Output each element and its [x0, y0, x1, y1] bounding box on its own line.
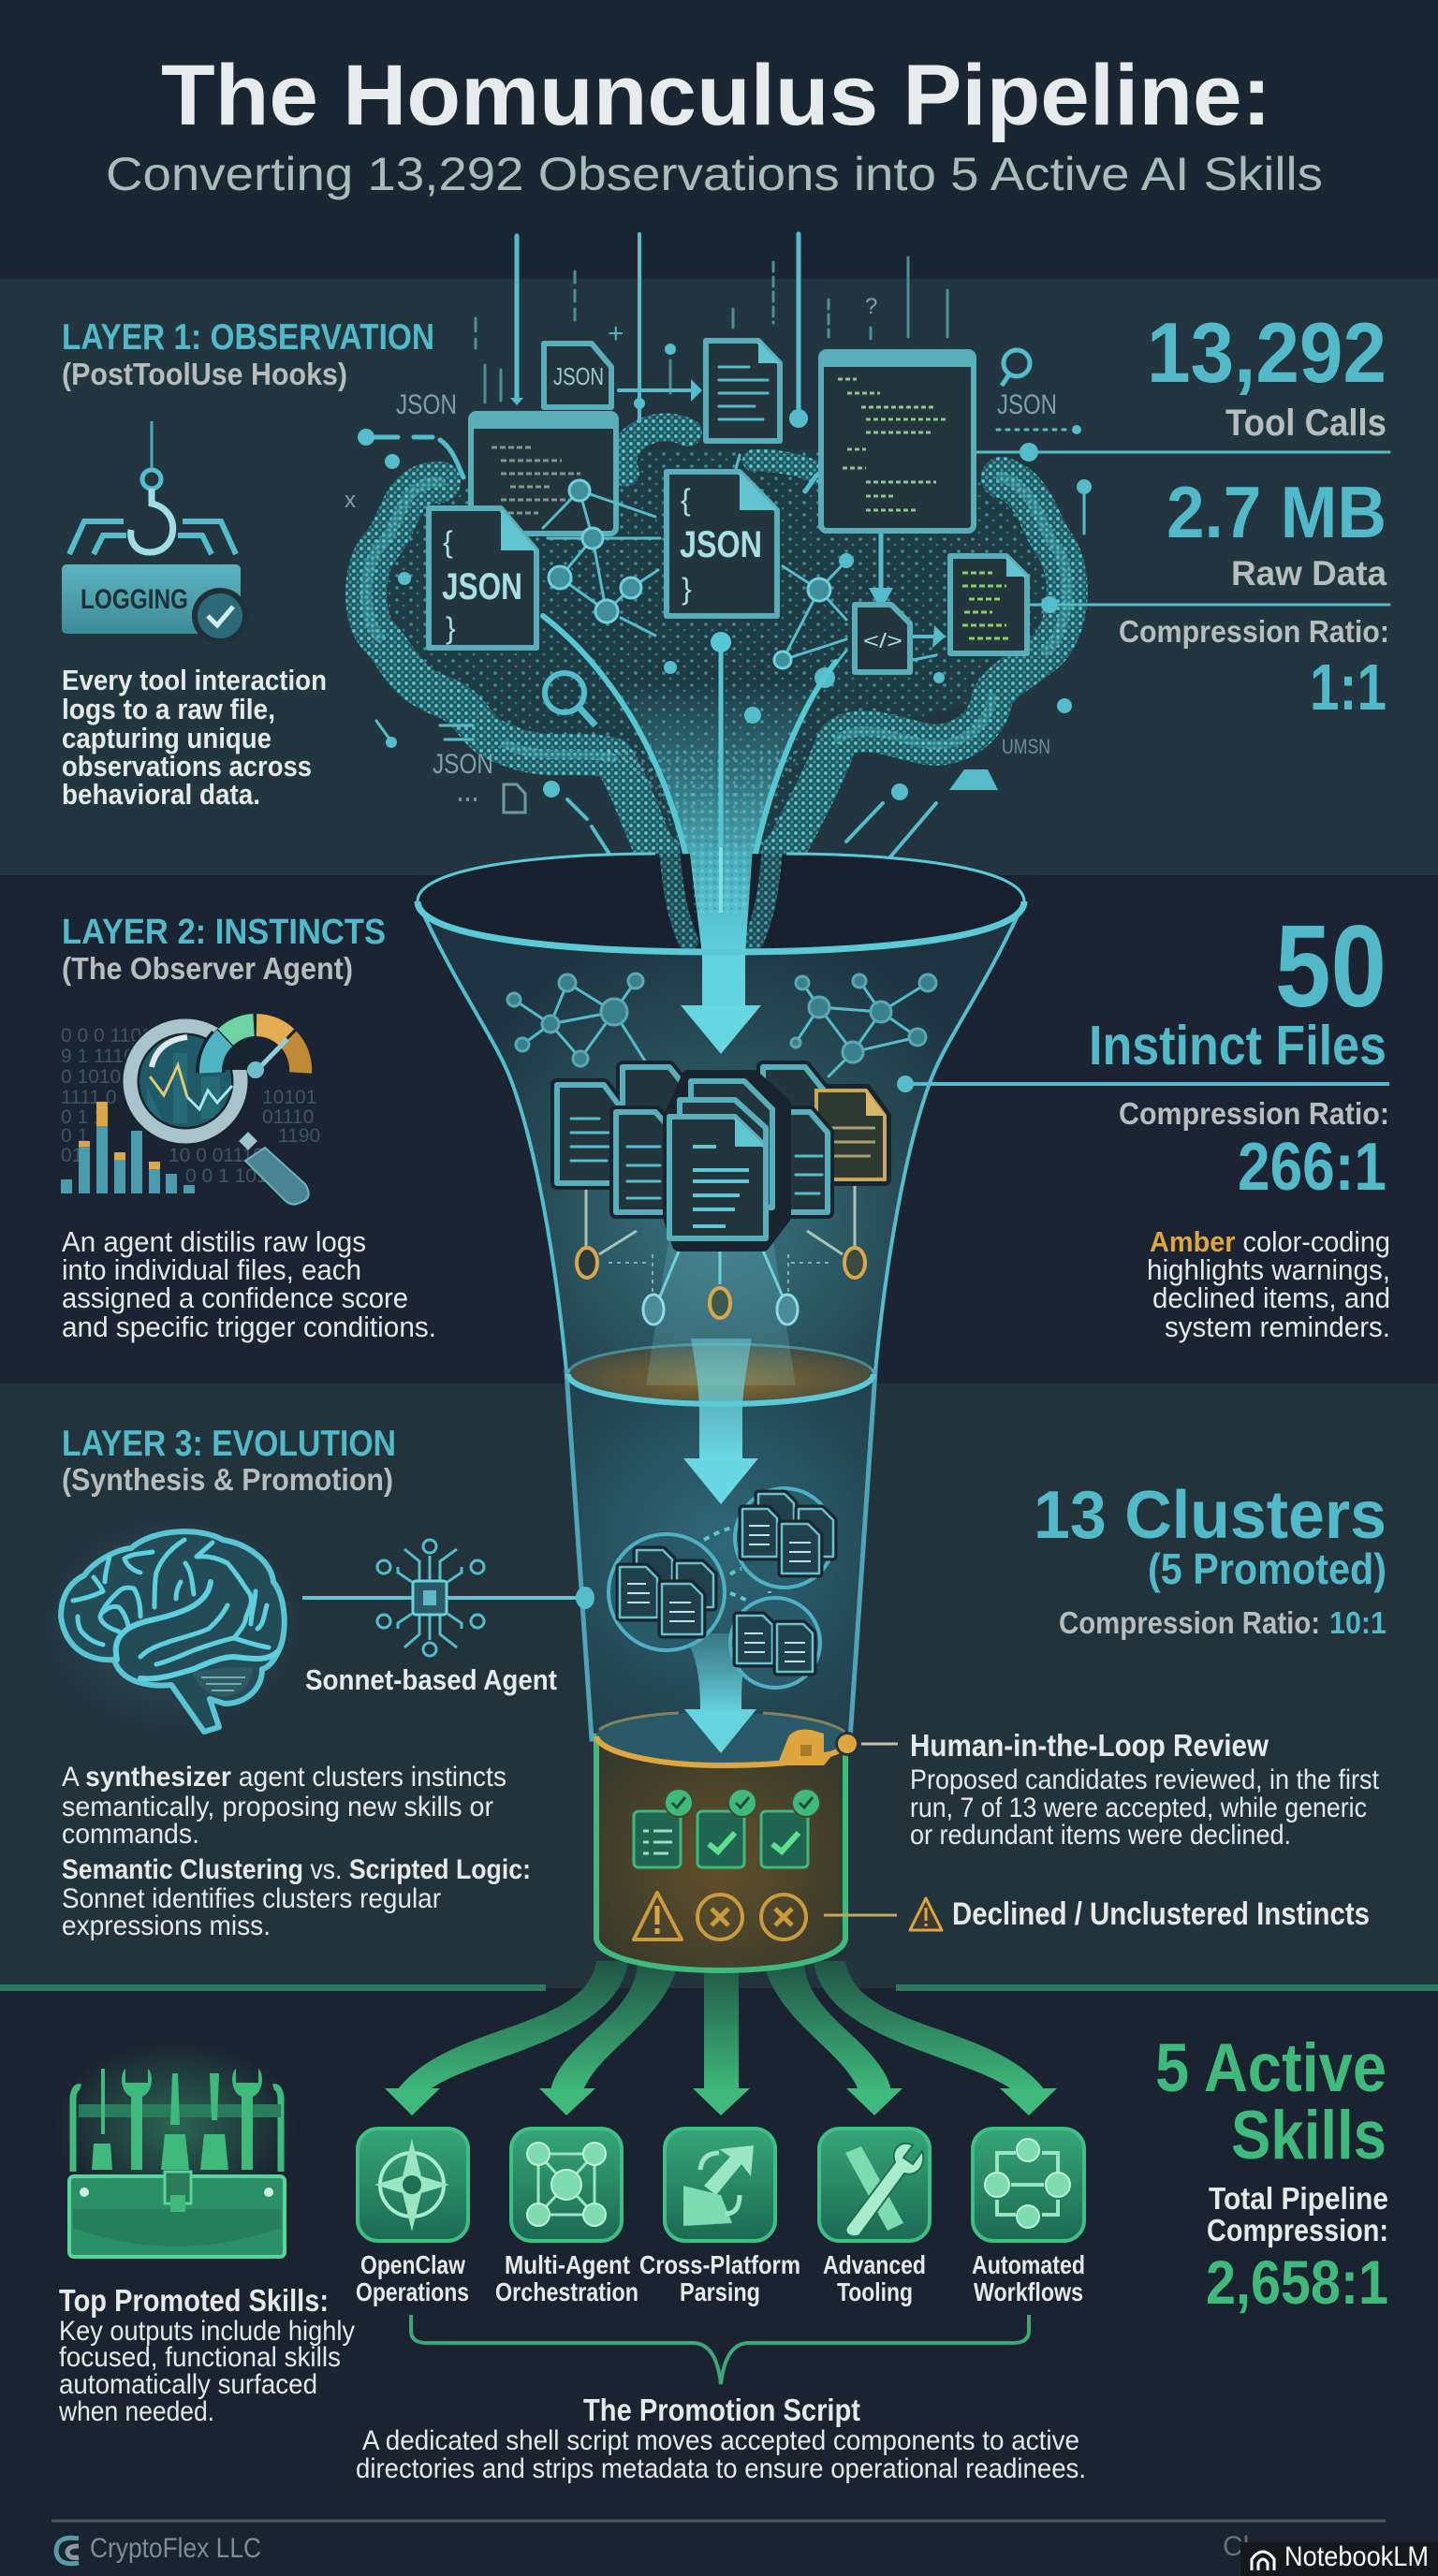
- footer: Cl: [1223, 2531, 1249, 2562]
- stream centre line: [719, 847, 723, 913]
- amber note: highlights warnings,: [1147, 1253, 1390, 1286]
- layer 1 stats: Raw Data: [1231, 554, 1387, 593]
- layer 1 description: capturing unique: [62, 722, 271, 754]
- layer 2 description: into individual files, each: [62, 1253, 361, 1286]
- JSON documents and windows: ?: [865, 294, 877, 319]
- JSON documents and windows: +: [608, 318, 624, 349]
- layer 1 description: [62, 664, 327, 811]
- layer 2 description: An agent distilis raw logs: [62, 1225, 366, 1258]
- central stream and arrows: [669, 847, 772, 1753]
- JSON documents and windows: JSON: [680, 524, 762, 565]
- title: The Homunculus Pipeline:: [161, 48, 1271, 143]
- layer 3 heading: LAYER 3: EVOLUTION: [62, 1424, 396, 1464]
- JSON documents and windows: JSON: [433, 749, 493, 780]
- JSON documents and windows: JSON: [442, 566, 522, 607]
- JSON documents and windows: x: [345, 488, 356, 513]
- layer 3 description: semantically, proposing new skills or: [62, 1792, 493, 1822]
- icon: magnifier with gauge and bars: [61, 1014, 320, 1205]
- accepted cards: [634, 1789, 820, 1867]
- icon: logging hook: [62, 421, 245, 641]
- falling data lines: [374, 234, 1389, 880]
- skill: Cross-Platform Parsing: [639, 2129, 800, 2306]
- layer 2 stats: 266:1: [1238, 1130, 1387, 1205]
- skill: Advanced Tooling: Advanced: [823, 2250, 926, 2279]
- top promoted skills text: automatically surfaced: [59, 2369, 317, 2400]
- human review callout: [910, 1728, 1380, 1851]
- icon: magnifier with gauge and bars: 1111 0: [61, 1087, 117, 1108]
- layer 3 stats: Compression Ratio:: [1059, 1605, 1320, 1640]
- layer 3 stats: (5 Promoted): [1148, 1544, 1387, 1593]
- layer 1 stats: Compression Ratio:: [1119, 614, 1389, 649]
- network of nodes: [543, 480, 846, 678]
- layer 2 heading: [62, 913, 386, 986]
- icon: magnifier with gauge and bars: 0 0 0 1101: [61, 1025, 153, 1046]
- layer 3 description: commands.: [62, 1819, 199, 1850]
- amber note: Amber color-coding: [1150, 1225, 1390, 1258]
- review callout connector: [835, 1732, 898, 1756]
- human review callout: run, 7 of 13 were accepted, while generic: [910, 1793, 1367, 1823]
- icon: magnifier with gauge and bars: 9 1 11101: [61, 1046, 145, 1067]
- skill: Automated Workflows: [972, 2129, 1085, 2306]
- arrow heads and dots: [358, 344, 1092, 800]
- connector and agent chip: [302, 1540, 594, 1656]
- arrow 2: [683, 1339, 758, 1504]
- skill: Multi-Agent Orchestration: Orchestration: [495, 2277, 638, 2306]
- skill: Advanced Tooling: Tooling: [837, 2277, 913, 2306]
- neck tube: [566, 1371, 875, 1739]
- layer 2 heading: LAYER 2: INSTINCTS: [62, 913, 386, 952]
- final stats: 2,658:1: [1206, 2247, 1388, 2317]
- top promoted skills text: Top Promoted Skills:: [59, 2283, 329, 2318]
- subtitle: Converting 13,292 Observations into 5 Active AI Skills: [106, 148, 1323, 200]
- stipple falling into mouth: [669, 847, 772, 941]
- JSON documents and windows: UMSN: [1002, 735, 1050, 758]
- JSON documents and windows: {: [443, 525, 453, 559]
- amber note: [1147, 1225, 1390, 1343]
- NotebookLM badge: [1240, 2541, 1438, 2576]
- JSON documents and windows: }: [682, 572, 692, 606]
- top promoted skills text: when needed.: [58, 2396, 214, 2427]
- layer 3 stats: 13 Clusters: [1034, 1478, 1387, 1553]
- promotion script text: [356, 2393, 1086, 2484]
- skill: OpenClaw Operations: Operations: [356, 2277, 469, 2306]
- top promoted skills text: focused, functional skills: [59, 2342, 341, 2373]
- declined callout: Declined / Unclustered Instincts: [952, 1896, 1370, 1932]
- footer: CryptoFlex LLC: [90, 2533, 261, 2564]
- funnel body: [418, 854, 1024, 1739]
- layer 1 heading: (PostToolUse Hooks): [62, 357, 347, 391]
- skill: Automated Workflows: Automated: [972, 2250, 1085, 2279]
- amber note: system reminders.: [1165, 1310, 1390, 1343]
- footer: [51, 2521, 1386, 2564]
- layer 3 stats: [1034, 1478, 1387, 1640]
- layer 1 stats: 1:1: [1310, 651, 1387, 724]
- review bucket: [596, 1713, 848, 1970]
- final stats: Skills: [1231, 2098, 1387, 2174]
- layer 1 stats: [1119, 306, 1389, 724]
- curved flow streams: [543, 616, 836, 899]
- icon: magnifier with gauge and bars: 0 1 1: [61, 1106, 105, 1128]
- layer 2 description: [62, 1225, 436, 1343]
- layer 1 description: Every tool interaction: [62, 664, 327, 696]
- layer 3 description: Semantic Clustering vs. Scripted Logic:: [62, 1854, 531, 1885]
- light cone: [646, 1236, 796, 1385]
- icon: green toolbox: [54, 2041, 298, 2257]
- icon: magnifier with gauge and bars: 10 0 01110: [169, 1145, 264, 1166]
- JSON documents and windows: JSON: [553, 362, 604, 390]
- icon: magnifier with gauge and bars: 1190: [278, 1125, 320, 1147]
- layer 1 heading: LAYER 1: OBSERVATION: [62, 317, 434, 358]
- layer 1 description: logs to a raw file,: [62, 693, 275, 725]
- layer 1 description: behavioral data.: [62, 778, 260, 811]
- upper bucket mouth: [596, 1713, 848, 1765]
- final stats: Total Pipeline: [1209, 2181, 1388, 2216]
- layer 2 heading: (The Observer Agent): [62, 951, 353, 986]
- layer 3 description: Sonnet identifies clusters regular: [62, 1883, 441, 1914]
- icon: brain: [33, 1507, 314, 1741]
- funnel rims: [418, 854, 1024, 1404]
- promotion script text: directories and strips metadata to ensure operational readinees.: [356, 2453, 1086, 2484]
- declined icons: [634, 1893, 806, 1939]
- human review callout: Proposed candidates reviewed, in the first: [910, 1764, 1380, 1795]
- layer 1 stats: 13,292: [1147, 306, 1387, 401]
- amber note: declined items, and: [1152, 1281, 1390, 1314]
- icon: magnifier with gauge and bars: 0 10101: [61, 1066, 132, 1088]
- JSON documents and windows: [345, 294, 1057, 812]
- icon: magnifier with gauge and bars: 0 1: [61, 1125, 88, 1147]
- data cloud illustration: [345, 234, 1389, 899]
- skill: OpenClaw Operations: [356, 2129, 469, 2306]
- skill: Cross-Platform Parsing: Cross-Platform: [639, 2250, 800, 2279]
- layer 3 heading: (Synthesis & Promotion): [62, 1462, 393, 1497]
- JSON documents and windows: </>: [863, 629, 902, 652]
- layer 2 description: assigned a confidence score: [62, 1281, 408, 1314]
- top stream: [689, 847, 753, 1005]
- layer 2 stats: 50: [1275, 902, 1387, 1032]
- amber rim: [596, 1736, 843, 1765]
- final stats: [1155, 2030, 1388, 2317]
- footer logo: [56, 2538, 79, 2564]
- cluster bubbles: [609, 1488, 834, 1688]
- layer 2 description: and specific trigger conditions.: [62, 1310, 436, 1343]
- layer 3 stats: 10:1: [1329, 1605, 1387, 1640]
- branching green arrows: [385, 1961, 1057, 2115]
- layer 2 stats: Instinct Files: [1089, 1015, 1387, 1076]
- top promoted skills text: [58, 2283, 355, 2427]
- JSON documents and windows: JSON: [997, 389, 1057, 420]
- skill: OpenClaw Operations: OpenClaw: [360, 2250, 465, 2279]
- layer 3 description: A synthesizer agent clusters instincts: [62, 1762, 506, 1793]
- skill: Automated Workflows: Workflows: [974, 2277, 1083, 2306]
- layer 1 stats: Tool Calls: [1225, 402, 1387, 444]
- icon: magnifier with gauge and bars: 10101: [262, 1087, 316, 1108]
- amber review clip: [777, 1730, 836, 1765]
- skill: Multi-Agent Orchestration: [495, 2129, 638, 2306]
- icon: magnifier with gauge and bars: 0 0 1 1010: [185, 1165, 278, 1187]
- skill: Cross-Platform Parsing: Parsing: [680, 2277, 760, 2306]
- arrow 1 head: [681, 1005, 761, 1054]
- icon: logging hook: LOGGING: [81, 584, 188, 615]
- layer 1 heading: [62, 317, 434, 391]
- green dividers: [0, 1984, 1438, 1991]
- JSON documents and windows: }: [446, 611, 456, 645]
- JSON documents and windows: JSON: [396, 389, 457, 420]
- layer 1 description: observations across: [62, 750, 312, 783]
- magnifier icons: [545, 350, 1030, 725]
- layer 3 description: [62, 1762, 531, 1941]
- icon: magnifier with gauge and bars: 01: [61, 1145, 82, 1166]
- layer 2 stats: [1089, 902, 1389, 1205]
- final stats: Compression:: [1207, 2213, 1388, 2247]
- stippled cloud: [366, 428, 1072, 889]
- top promoted skills text: Key outputs include highly: [59, 2316, 355, 2347]
- funnel mouth: [418, 854, 1024, 952]
- instinct networks inside funnel: [507, 973, 936, 1076]
- layer 3 heading: [62, 1424, 396, 1497]
- declined connector: [824, 1898, 942, 1930]
- layer 1 stats: 2.7 MB: [1167, 471, 1387, 553]
- final stats: 5 Active: [1155, 2030, 1387, 2106]
- human review callout: Human-in-the-Loop Review: [910, 1728, 1269, 1763]
- icon: magnifier with gauge and bars: 01110: [262, 1106, 314, 1128]
- promotion script text: A dedicated shell script moves accepted components to active: [362, 2425, 1079, 2456]
- instinct file stack: [557, 1067, 1389, 1325]
- amber pool: [568, 1344, 873, 1404]
- skill: Multi-Agent Orchestration: Multi-Agent: [505, 2250, 630, 2279]
- human review callout: or redundant items were declined.: [910, 1820, 1291, 1851]
- brace: [411, 2315, 1029, 2384]
- arrow 3: [683, 1633, 756, 1753]
- agent label: Sonnet-based Agent: [305, 1663, 557, 1696]
- layer 3 description: expressions miss.: [62, 1910, 271, 1941]
- skill: Advanced Tooling: [819, 2129, 930, 2306]
- promotion script text: The Promotion Script: [583, 2393, 860, 2427]
- stream texture: [691, 847, 751, 913]
- JSON documents and windows: {: [681, 483, 691, 517]
- layer 2 stats: Compression Ratio:: [1119, 1096, 1389, 1131]
